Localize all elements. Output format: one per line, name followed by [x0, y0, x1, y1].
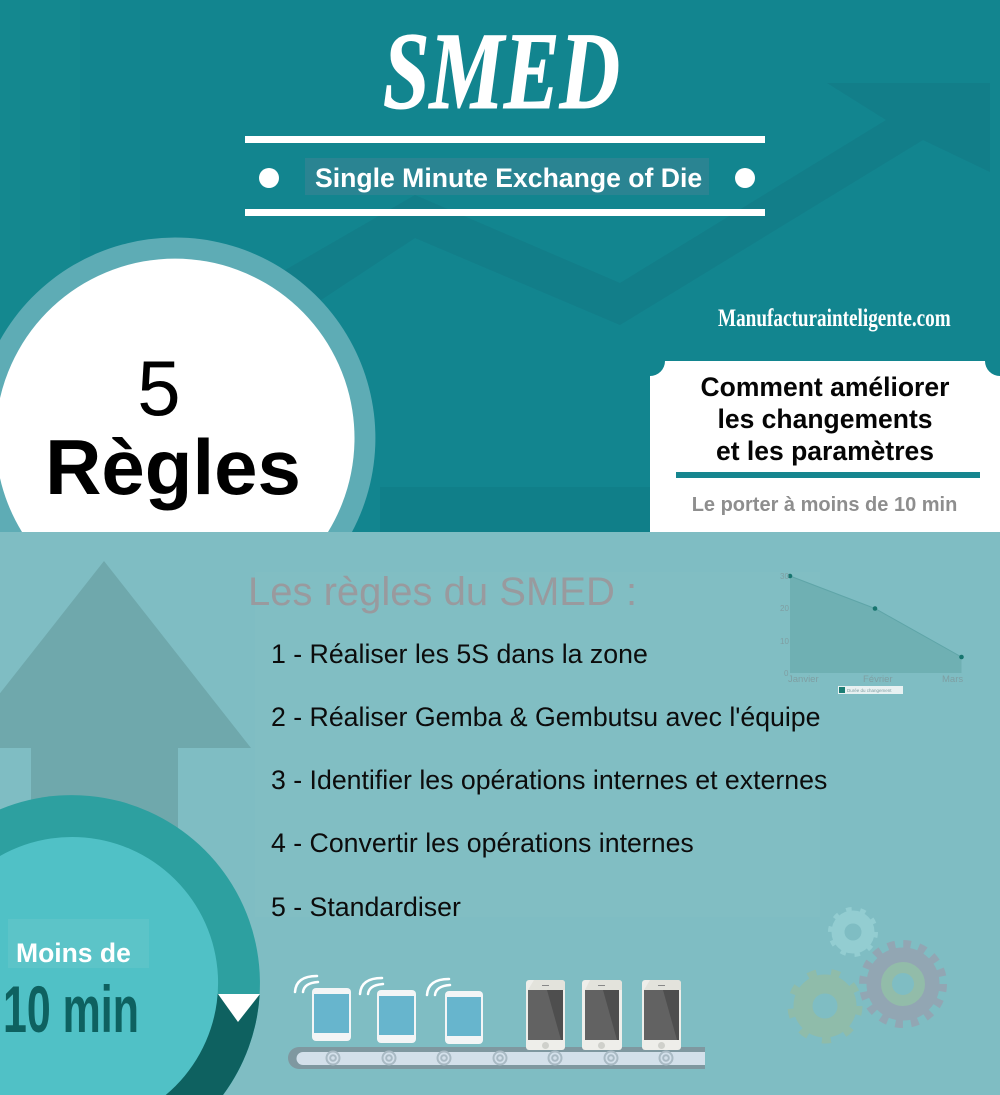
big arrow [0, 561, 251, 900]
rules list [271, 639, 827, 922]
badge word: Règles [45, 423, 301, 511]
subtitle text: Single Minute Exchange of Die [315, 163, 702, 193]
area chart: durée du changement: Janvier [788, 674, 819, 685]
panel heading: et les paramètres [716, 436, 934, 466]
phone 2 [582, 980, 622, 1050]
panel heading [701, 372, 950, 466]
area chart: durée du changement: Février [863, 674, 893, 685]
area chart: durée du changement: 30 [780, 572, 789, 581]
rule 2: 2 - Réaliser Gemba & Gembutsu avec l'équipe [271, 702, 820, 732]
area chart: durée du changement: 0 [784, 669, 789, 678]
panel heading: Comment améliorer [701, 372, 949, 402]
illustration: conveyor with devices [288, 974, 705, 1069]
area chart: durée du changement: Durée du changement [847, 688, 892, 693]
rule 1: 1 - Réaliser les 5S dans la zone [271, 639, 648, 669]
website label: Manufacturainteligente.com [718, 305, 951, 332]
rule 5: 5 - Standardiser [271, 892, 461, 922]
rule 4: 4 - Convertir les opérations internes [271, 828, 694, 858]
dial label: Moins de [16, 938, 131, 968]
timer dial [0, 795, 260, 1095]
panel heading: les changements [717, 404, 933, 434]
tablet 1 [295, 976, 351, 1041]
area chart: durée du changement [780, 572, 964, 694]
title: SMED [383, 10, 620, 132]
subtitle banner [245, 136, 765, 216]
rule 3: 3 - Identifier les opérations internes et externes [271, 765, 827, 795]
phone 3 [642, 980, 681, 1050]
icon: gears [788, 907, 947, 1044]
rules heading: Les règles du SMED : [248, 570, 637, 614]
tablet 3 [427, 979, 483, 1044]
badge: 5 Règles [0, 238, 376, 532]
tablet 2 [360, 978, 416, 1043]
panel subtext: Le porter à moins de 10 min [692, 494, 957, 516]
area chart: durée du changement: 20 [780, 604, 789, 613]
area chart: durée du changement: 10 [780, 637, 789, 646]
gear light [830, 910, 876, 954]
badge number: 5 [137, 344, 181, 432]
area chart: durée du changement: Mars [942, 674, 963, 685]
gear green [791, 972, 859, 1040]
panel: how to improve [650, 361, 1000, 532]
gear gray [864, 944, 942, 1024]
conveyor belt [288, 1047, 705, 1069]
phone 1 [526, 980, 565, 1050]
dial value: 10 min [3, 972, 139, 1046]
